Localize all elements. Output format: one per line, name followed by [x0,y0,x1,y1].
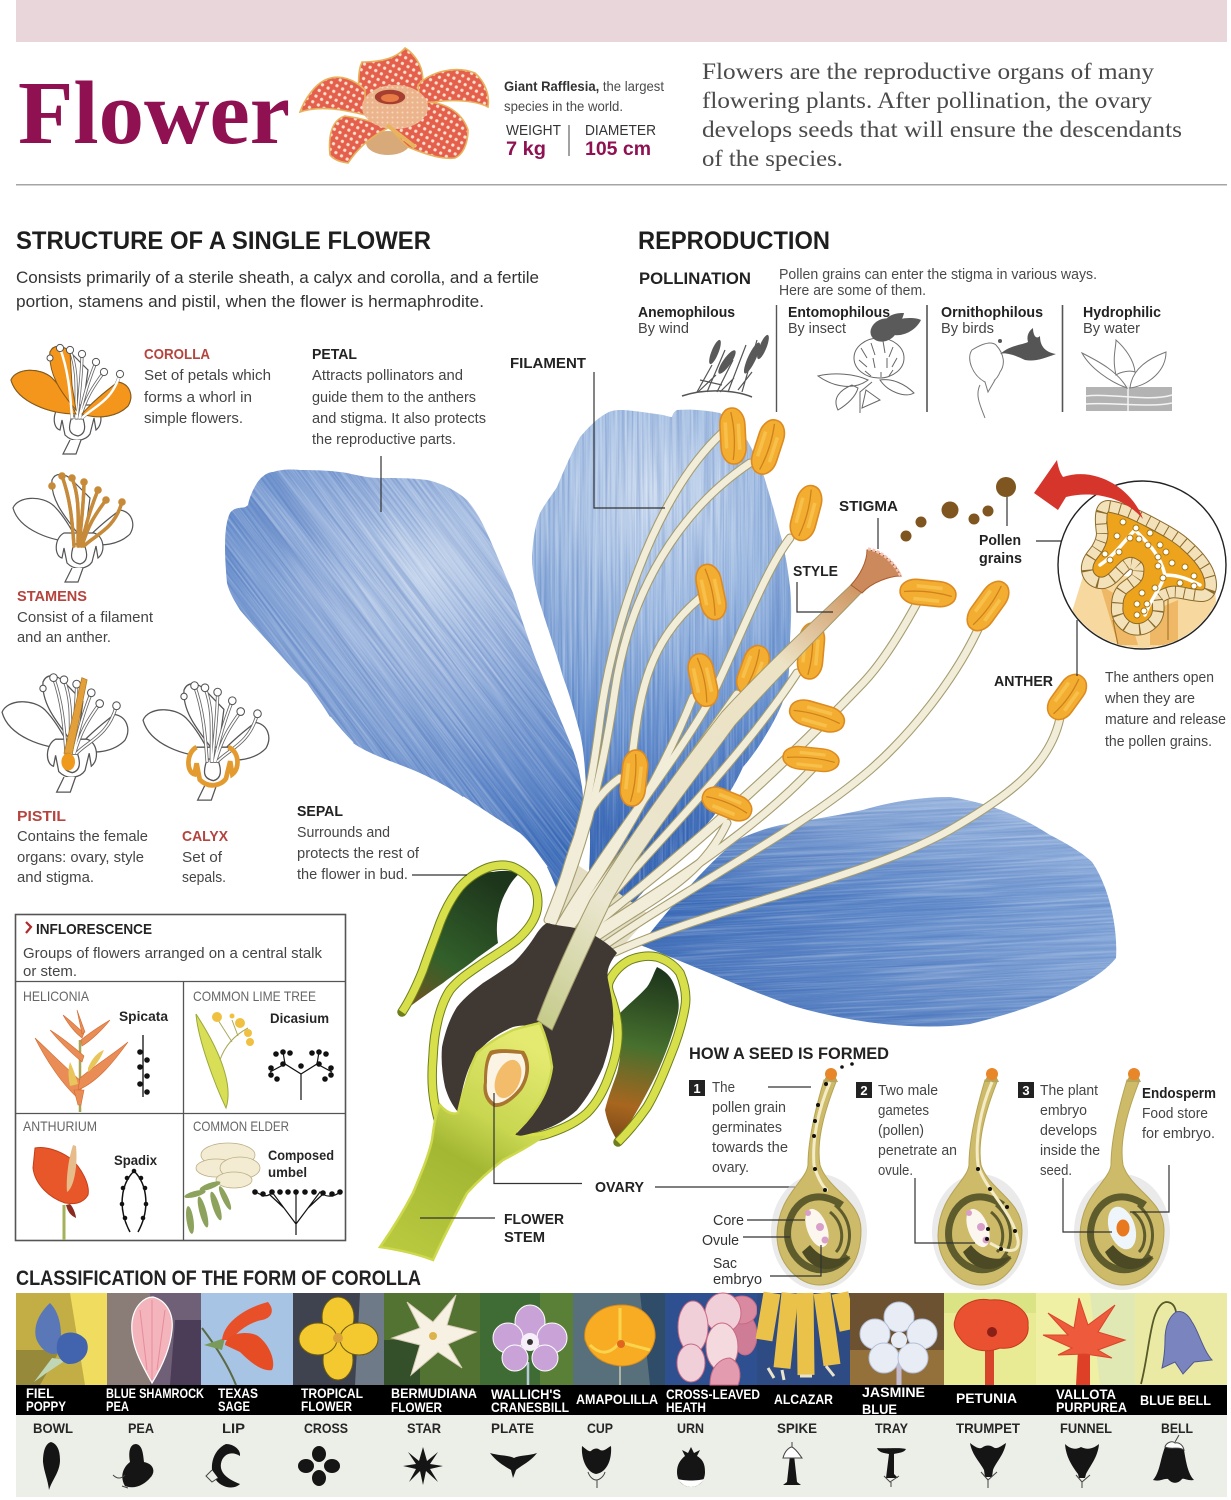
label: petal: guide them to the anthers [312,389,476,406]
cell: anthurium [23,1118,157,1240]
icon: trumpet [970,1443,1006,1488]
seed step 3: Endosperm [1142,1085,1216,1102]
corolla form silhouettes [43,1435,1194,1490]
icon: tray [877,1448,906,1487]
label: filament [510,355,665,508]
inset: anther cross-section [1058,481,1226,650]
flower name labels: POPPY [26,1398,67,1414]
corolla form labels [33,1420,1193,1436]
flower name labels: JASMINE [862,1384,925,1400]
upper blue petal [532,410,792,902]
label: style: STYLE [793,563,838,580]
seed step 2: penetrate an [878,1142,957,1159]
label: sepal [297,803,467,883]
cell: common elder: umbel [268,1164,307,1180]
flower name labels: AMAPOLILLA [576,1391,658,1407]
flower: blue shamrock pea [107,1293,202,1385]
structure intro text: Consists primarily of a sterile sheath, a calyx and corolla, and a fertile [16,268,539,287]
seed step 3: develops [1040,1122,1097,1139]
panel: how a seed is formed: HOW A SEED IS FORMED [689,1044,889,1063]
label: flower stem: FLOWER [504,1211,564,1228]
flower: vallota purpurea [1036,1293,1136,1385]
panel: corolla [11,344,271,454]
corolla form labels: CUP [587,1420,613,1436]
seed step 2: gametes [878,1102,929,1119]
corolla form labels: TRAY [875,1420,909,1436]
illustration: giant rafflesia [300,48,488,163]
label: sepal: Surrounds and [297,824,390,841]
panel: pollination: Here are some of them. [779,283,926,299]
seed step 2: Two male [878,1082,938,1099]
icon: cross [298,1446,340,1486]
panel: pollination: By wind [638,320,689,337]
seed step 2 [856,1068,1028,1290]
panel: inflorescence: Groups of flowers arranged on a central stalk [23,945,322,962]
label: pollen grains [979,497,1115,567]
seed step 1: ovary. [712,1159,749,1176]
icon: lip [206,1444,240,1487]
label: flower stem [420,1211,564,1246]
rafflesia caption: Giant Rafflesia, the largest [504,78,664,94]
intro paragraph [702,59,1182,171]
corolla form labels: PEA [128,1420,154,1436]
label: filament: FILAMENT [510,355,586,372]
panel: inflorescence: INFLORESCENCE [36,921,152,938]
flower name labels: VALLOTA [1056,1386,1116,1402]
seed step 1: Core [713,1212,744,1229]
seed step 1: Sac [713,1255,737,1272]
seed step 3 [1018,1068,1216,1290]
panel: pistil [2,674,148,886]
icon: bee on clover [818,313,921,413]
filaments [547,433,1060,953]
label: flower stem: STEM [504,1229,545,1246]
seed step 3: seed. [1040,1162,1072,1179]
cell: anthurium: Spadix [114,1152,157,1168]
cell: common lime tree [193,988,334,1108]
panel: pollination: Hydrophilic [1083,304,1161,321]
panel: pistil: and stigma. [17,869,94,886]
panel: corolla: Set of petals which [144,367,271,384]
flower name labels: BLUE [862,1401,897,1417]
cell: common lime tree: COMMON LIME TREE [193,988,316,1004]
panel: pollination: By birds [941,320,994,337]
seed step 3: The plant [1040,1082,1099,1099]
top banner band [16,0,1227,42]
corolla form labels: STAR [407,1420,441,1436]
label: pollen grains: grains [979,550,1022,567]
label: anther [994,620,1077,690]
cell: anthurium: ANTHURIUM [23,1118,97,1134]
panel: pollination [638,267,1172,418]
panel: stamens: STAMENS [17,588,87,605]
seed step 1: 1 [693,1081,701,1096]
cell: heliconia: HELICONIA [23,988,90,1004]
flower: bermudiana flower [384,1293,481,1385]
panel: calyx: sepals. [182,869,226,886]
flower name labels: CROSS-LEAVED [666,1386,760,1402]
panel: corolla: simple flowers. [144,410,243,427]
cell: heliconia: Spicata [119,1008,168,1024]
flower: texas sage [201,1293,294,1385]
panel: pollination: Entomophilous [788,304,890,321]
text: anthers note: mature and release [1105,711,1226,728]
flower name labels: CRANESBILL [491,1399,569,1415]
panel: pollination: Pollen grains can enter the stigma in various ways. [779,267,1097,283]
corolla form labels: BOWL [33,1420,73,1436]
diagram: stamens highlighted [13,472,133,582]
panel: corolla: forms a whorl in [144,389,252,406]
panel: pistil: PISTIL [17,808,66,825]
panel: stamens [13,472,154,646]
flower name labels [26,1384,1211,1417]
rafflesia caption: species in the world. [504,98,623,114]
flower name labels: TROPICAL [301,1385,363,1401]
corolla form labels: LIP [222,1420,245,1436]
text: anthers note: the pollen grains. [1105,733,1212,750]
rafflesia caption: WEIGHT [506,122,561,139]
flower: tropical flower [293,1293,385,1385]
diagram: pistil highlighted [2,674,128,792]
panel: classification of corolla forms: CLASSIFICATION OF THE FORM OF COROLLA [16,1267,421,1290]
icon: urn [677,1447,705,1487]
ovule [483,1049,529,1107]
flower name labels: PETUNIA [956,1390,1017,1406]
panel: corolla: COROLLA [144,346,210,363]
structure intro text: portion, stamens and pistil, when the flower is hermaphrodite. [16,292,484,311]
ovary chamber [442,923,617,1137]
panel: pollination: Anemophilous [638,304,735,321]
cell: common elder: Composed [268,1147,334,1163]
panel: calyx [143,682,269,886]
corolla form labels: TRUMPET [956,1420,1020,1436]
flower: jasmine blue [850,1293,945,1385]
panel: pollination: By insect [788,320,847,337]
icon: bell [1153,1435,1194,1483]
icon: cup [582,1446,611,1488]
panel: stamens: Consist of a filament [17,609,154,626]
flower stem and receptacle [380,1023,552,1260]
flower: cross-leaved heath [665,1293,758,1385]
cell: common lime tree: Dicasium [270,1010,329,1026]
flower name labels: FLOWER [301,1398,352,1414]
cell: heliconia [23,988,168,1112]
icon: funnel [1065,1444,1099,1488]
seed step 3: embryo [1040,1102,1087,1119]
cell: common elder [184,1118,343,1235]
seed step 3: inside the [1040,1142,1100,1159]
flower name labels: SAGE [218,1398,250,1414]
anthers [619,407,1092,825]
panel: classification of corolla forms [16,1267,1227,1497]
panel: inflorescence [15,914,346,1241]
icon: star [403,1447,443,1485]
right blue petal [642,797,1116,1026]
flower: blue bell [1135,1293,1227,1385]
label: stigma: STIGMA [839,498,898,515]
panel: inflorescence: or stem. [23,963,77,980]
flower name labels: PURPUREA [1056,1399,1127,1415]
corolla form labels: PLATE [491,1420,534,1436]
flower: alcazar [757,1293,851,1385]
intro paragraph: Flowers are the reproductive organs of many [702,59,1155,84]
panel: how a seed is formed [689,1044,1216,1290]
seed step 1: pollen grain [712,1099,786,1116]
flower name labels: HEATH [666,1399,706,1415]
seed step 1: embryo [713,1271,762,1288]
left blue petal [225,470,583,888]
intro paragraph: develops seeds that will ensure the descendants [702,117,1182,142]
arrow: pollen release [1034,460,1143,519]
icon: bowl [43,1442,60,1490]
panel: stamens: and an anther. [17,629,111,646]
main illustration: flower cross-section [0,232,1157,1260]
panel: pollination: By water [1083,320,1140,337]
heading: reproduction: REPRODUCTION [638,227,830,255]
panel: pistil: organs: ovary, style [17,849,144,866]
seed step 3: for embryo. [1142,1125,1215,1142]
label: petal [312,346,486,512]
text: anthers note: The anthers open [1105,669,1214,686]
icon: spike [783,1442,802,1485]
diagram: calyx highlighted [143,682,269,800]
rafflesia caption: 7 kg [506,139,546,160]
style and stigma [537,549,901,1030]
seed step 2: (pollen) [878,1122,924,1139]
flower name labels: ALCAZAR [774,1391,833,1407]
flower: fiel poppy [16,1293,108,1385]
rafflesia caption [504,78,664,160]
intro paragraph: flowering plants. After pollination, the ovary [702,88,1153,113]
label: ovary: OVARY [595,1179,644,1196]
icon: plate [490,1453,537,1478]
label: petal: the reproductive parts. [312,431,456,448]
title: Flower: Flower [18,64,290,163]
intro paragraph: of the species. [702,146,843,171]
flower: wallich's cranesbill [480,1293,574,1385]
flower name labels: TEXAS [218,1385,258,1401]
panel: calyx: Set of [182,849,223,866]
corolla form labels: CROSS [304,1420,348,1436]
rafflesia caption: DIAMETER [585,122,656,139]
label: style [793,563,838,612]
seed step 3: Food store [1142,1105,1208,1122]
panel: pistil: Contains the female [17,828,148,845]
right sepal [510,956,686,1142]
flower name labels: WALLICH'S [491,1386,561,1402]
label: petal: Attracts pollinators and [312,367,463,384]
flower name labels: BERMUDIANA [391,1385,477,1401]
panel: pollination: POLLINATION [639,269,751,288]
panel: pollination: Ornithophilous [941,304,1043,321]
rafflesia caption: 105 cm [585,139,651,160]
label: petal: and stigma. It also protects [312,410,486,427]
flower name labels: BLUE SHAMROCK [106,1385,204,1401]
label: sepal: protects the rest of [297,845,420,862]
corolla form labels: URN [677,1420,704,1436]
structure intro text [16,268,539,311]
seed step 1: towards the [712,1139,788,1156]
seed step 1: germinates [712,1119,782,1136]
seed step 1: Ovule [702,1232,739,1249]
icon: pea [113,1444,153,1488]
label: pollen grains: Pollen [979,532,1021,549]
seed step 2: 2 [860,1083,868,1098]
label: ovary [494,1093,797,1196]
icon: bird and flower [970,328,1056,418]
heading: structure of a single flower: STRUCTURE OF A SINGLE FLOWER [16,227,431,255]
text: anthers note [1104,669,1226,750]
label: stigma [839,498,898,549]
flower: amapolilla [573,1293,666,1385]
cell: common elder: COMMON ELDER [193,1118,289,1134]
icon: reeds in wind [682,334,771,397]
flower name labels: PEA [106,1398,129,1414]
corolla form labels: BELL [1161,1420,1193,1436]
label: petal: PETAL [312,346,357,363]
corolla form labels: SPIKE [777,1420,817,1436]
text: anthers note: when they are [1104,690,1195,707]
seed step 2: ovule. [878,1162,913,1179]
label: anther: ANTHER [994,673,1053,690]
seed step 1 [689,1062,867,1290]
corolla form labels: FUNNEL [1060,1420,1112,1436]
panel: calyx: CALYX [182,828,228,845]
flower: petunia [944,1293,1037,1385]
icon: aquatic plant in water [1082,340,1172,411]
diagram: corolla highlighted [11,344,131,454]
flower name labels: BLUE BELL [1140,1392,1211,1408]
label: sepal: SEPAL [297,803,343,820]
label: sepal: the flower in bud. [297,866,408,883]
seed step 3: 3 [1022,1083,1030,1098]
flower name labels: FIEL [26,1385,54,1401]
pollen grains [900,477,1016,542]
left sepal [402,865,538,1125]
flower name labels: FLOWER [391,1399,442,1415]
seed step 1: The [712,1079,735,1096]
